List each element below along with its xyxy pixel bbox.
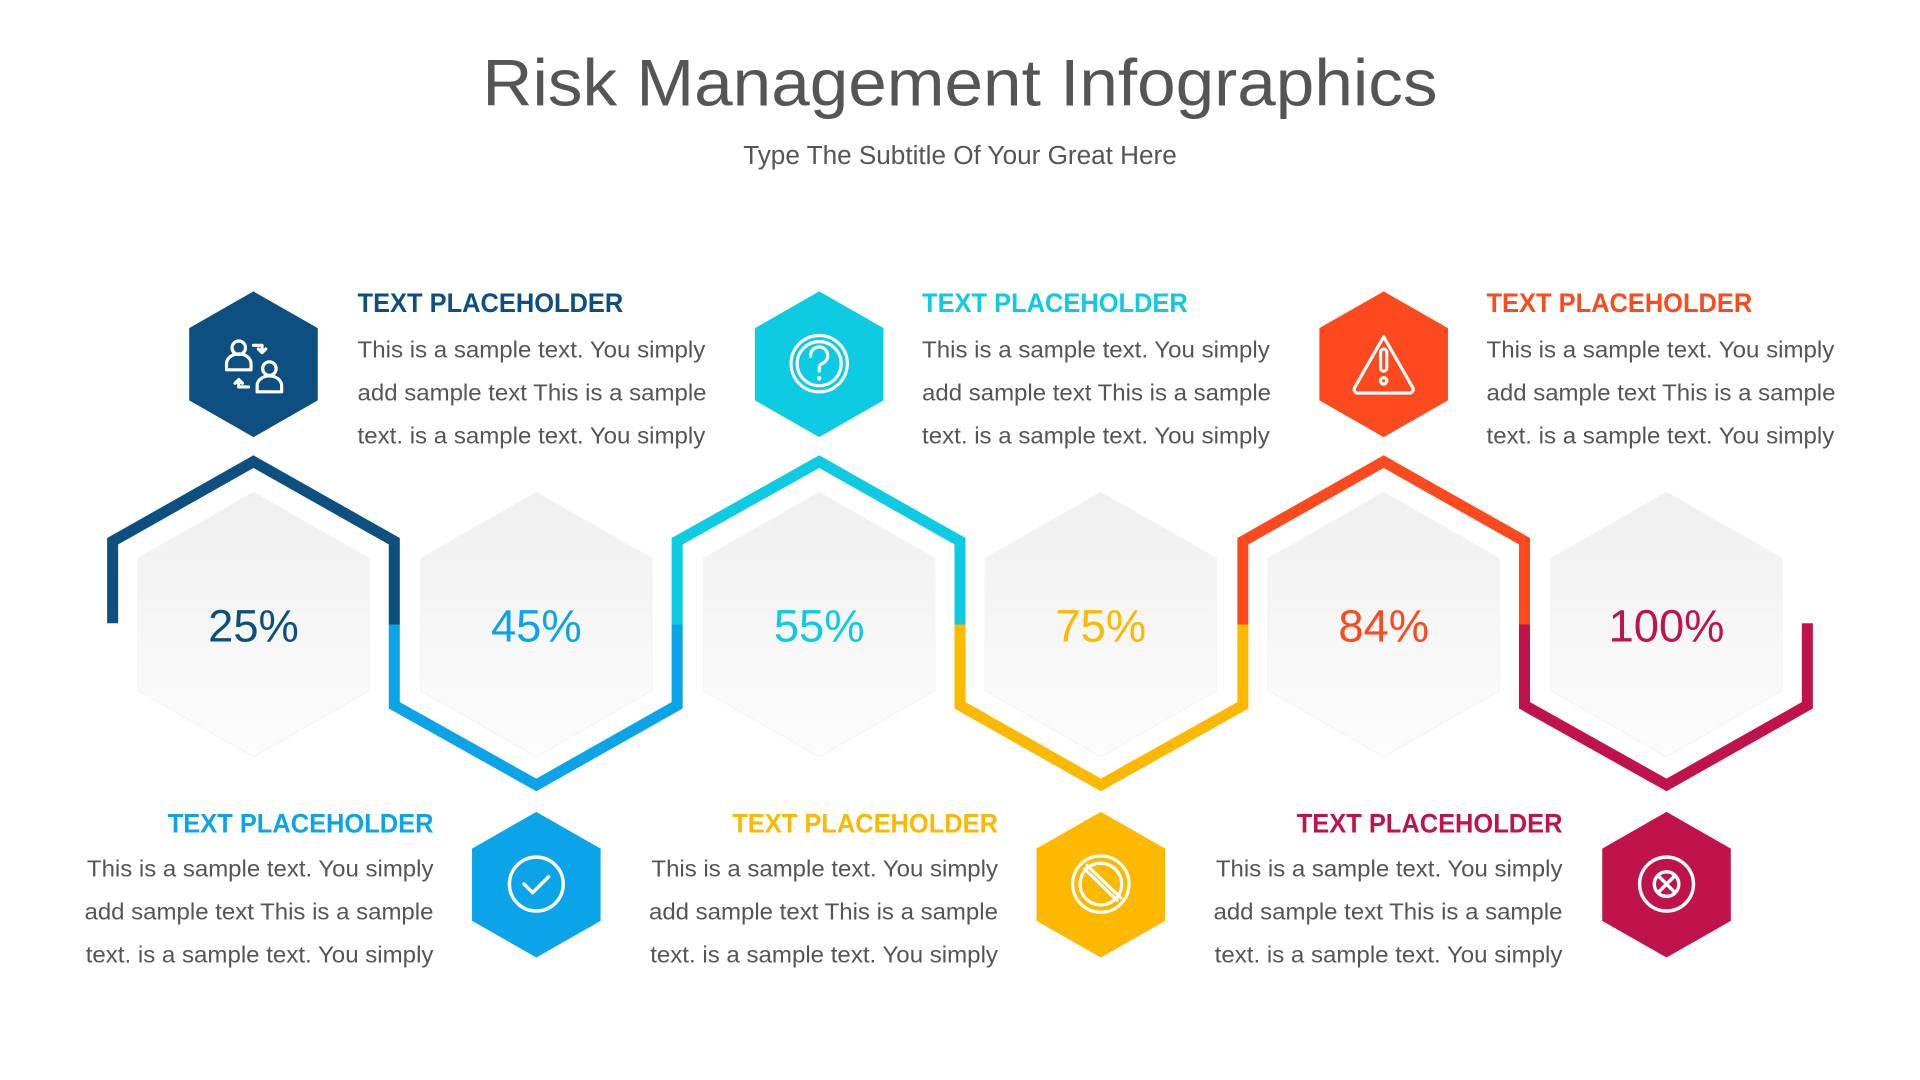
text block 3: [922, 288, 1271, 448]
text block 5: TEXT PLACEHOLDER: [1487, 288, 1752, 318]
text block 1: text. is a sample text. You simply: [358, 422, 706, 448]
text block 5: This is a sample text. You simply: [1487, 337, 1835, 363]
hex: 100%: 100%: [1609, 601, 1724, 652]
text block 4: TEXT PLACEHOLDER: [732, 809, 998, 839]
hex: 55%: [703, 492, 935, 757]
text block 4: add sample text This is a sample: [649, 899, 998, 925]
hex: 75%: 75%: [1055, 601, 1146, 652]
icon: people exchange: [189, 291, 318, 437]
text block 4: text. is a sample text. You simply: [650, 941, 998, 967]
text block 3: TEXT PLACEHOLDER: [922, 288, 1188, 318]
icon: question: [755, 291, 883, 437]
text block 6: [1213, 809, 1563, 967]
text block 4: [649, 809, 998, 967]
hex: 45%: 45%: [491, 601, 582, 652]
text block 1: TEXT PLACEHOLDER: [358, 288, 623, 318]
icon: prohibited: [1037, 812, 1165, 958]
text block 1: [358, 288, 707, 448]
text block 2: This is a sample text. You simply: [87, 856, 434, 882]
text block 4: This is a sample text. You simply: [651, 856, 998, 882]
text block 6: add sample text This is a sample: [1213, 899, 1562, 925]
icon: warning: [1319, 291, 1448, 437]
zigzag outline path: [113, 462, 1807, 785]
text block 5: [1487, 288, 1836, 448]
text block 1: This is a sample text. You simply: [358, 337, 706, 363]
hex: 100%: [1551, 492, 1782, 757]
hex: 25%: 25%: [208, 601, 299, 652]
hex: 84%: [1268, 492, 1499, 757]
text block 5: text. is a sample text. You simply: [1487, 422, 1835, 448]
gray hexagons with percentages: [138, 492, 1782, 757]
text block 6: text. is a sample text. You simply: [1215, 941, 1563, 967]
subtitle: Type The Subtitle Of Your Great Here: [743, 142, 1177, 170]
text block 6: TEXT PLACEHOLDER: [1297, 809, 1562, 839]
text block 1: add sample text This is a sample: [358, 379, 707, 405]
hex: 84%: 84%: [1338, 601, 1429, 652]
text block 2: text. is a sample text. You simply: [86, 941, 434, 967]
text block 3: This is a sample text. You simply: [922, 337, 1270, 363]
hex: 45%: [421, 492, 652, 757]
text block 2: [84, 809, 434, 967]
text block 3: text. is a sample text. You simply: [922, 422, 1270, 448]
hex: 25%: [138, 492, 369, 757]
hex: 55%: 55%: [774, 601, 865, 652]
text block 6: This is a sample text. You simply: [1216, 856, 1563, 882]
text block 2: TEXT PLACEHOLDER: [168, 809, 433, 839]
text block 2: add sample text This is a sample: [84, 899, 433, 925]
hex: 75%: [985, 492, 1217, 757]
text block 5: add sample text This is a sample: [1487, 379, 1836, 405]
title: Risk Management Infographics: [482, 46, 1438, 120]
text block 3: add sample text This is a sample: [922, 379, 1271, 405]
icon: cancel: [1602, 812, 1731, 958]
icon: check: [472, 812, 601, 958]
